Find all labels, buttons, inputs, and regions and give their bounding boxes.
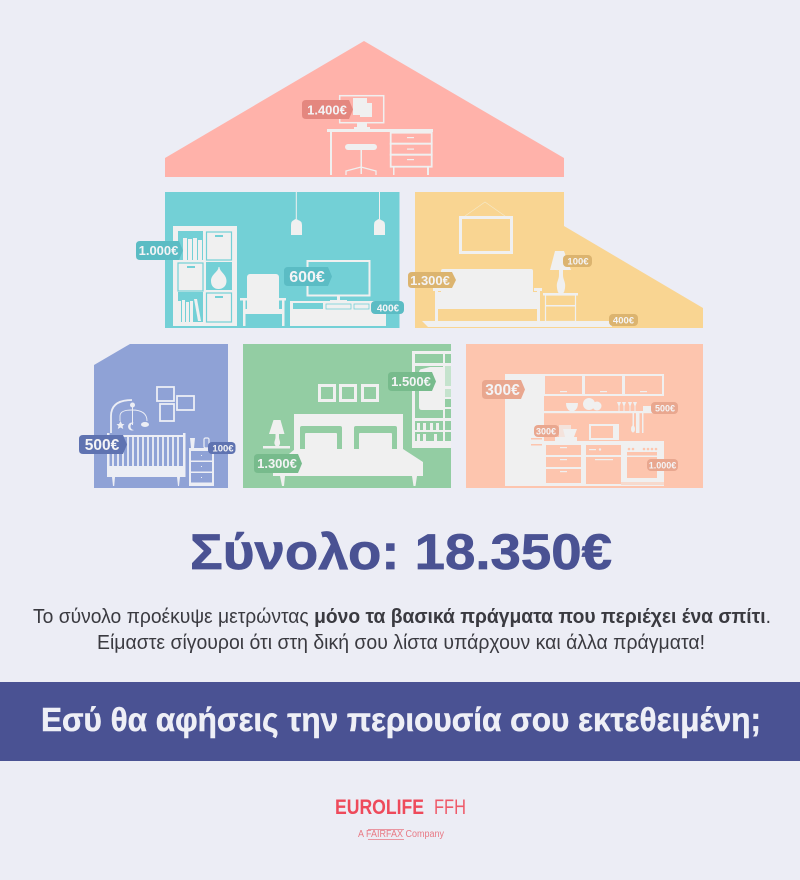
kitchen background xyxy=(466,344,703,488)
icon: armchair xyxy=(240,274,286,326)
price tag 500€ xyxy=(651,402,678,414)
icon: bedside lamp xyxy=(263,420,290,448)
price tag 100€ xyxy=(208,442,236,454)
banner question: Εσύ θα αφήσεις την περιουσία σου εκτεθειμένη; xyxy=(41,701,761,738)
lounge background xyxy=(415,192,703,328)
price tag 1.500€ xyxy=(388,372,436,391)
icon: crib with mobile xyxy=(107,400,186,486)
nursery background xyxy=(94,344,228,488)
price tag 100€ xyxy=(563,255,592,268)
icon: sofa and rug xyxy=(422,269,612,327)
price tag 1.300€: 1.300€ xyxy=(410,273,450,288)
price tag 400€: 400€ xyxy=(377,304,400,314)
logo wordmark: EUROLIFE xyxy=(335,796,424,819)
attic background xyxy=(165,41,564,177)
title: total: Σύνολο: 18.350€ xyxy=(190,524,612,580)
price tag 500€: 500€ xyxy=(85,437,120,454)
price tag 300€ small: 300€ xyxy=(536,426,556,436)
icon: bookcase xyxy=(173,226,237,326)
icon: nursery chest xyxy=(189,438,214,486)
panel: kitchen xyxy=(466,344,703,488)
price tag 1.400€: 1.400€ xyxy=(307,102,347,118)
panel: living room xyxy=(136,192,404,328)
icon: bed xyxy=(273,414,423,486)
logo FFH: FFH xyxy=(434,796,466,819)
price tag 1.000€: 1.000€ xyxy=(139,243,178,258)
price tag 1.400€ xyxy=(302,100,353,119)
price tag 100€: 100€ xyxy=(212,444,234,454)
price tag 1.300€: 1.300€ xyxy=(257,456,297,471)
price tag 600€: 600€ xyxy=(289,269,325,286)
panel: nursery xyxy=(79,344,236,488)
icon: microwave xyxy=(589,424,619,440)
panel: attic office xyxy=(165,41,564,177)
icon: wall frames xyxy=(157,387,194,421)
logo: Eurolife FFH xyxy=(335,796,466,840)
price tag 400€ xyxy=(609,314,638,326)
price tag 400€ xyxy=(371,301,404,314)
price tag 400€: 400€ xyxy=(613,316,635,326)
second line: Είμαστε σίγουροι ότι στη δική σου λίστα υπάρχουν και άλλα πράγματα! xyxy=(97,632,705,654)
icon: television and unit xyxy=(290,261,386,326)
living room background xyxy=(165,192,400,328)
logo tagline: A FAIRFAX Company xyxy=(358,829,444,840)
first line: Το σύνολο προέκυψε μετρώντας μόνο τα βασικά πράγματα που περιέχει ένα σπίτι. xyxy=(33,606,771,628)
price tag 1.500€: 1.500€ xyxy=(391,374,431,389)
icon: mixer xyxy=(555,425,577,441)
price tag 300€ small xyxy=(534,425,559,437)
icon: fridge xyxy=(505,374,544,486)
icon: pendant lamps xyxy=(291,192,385,235)
icon: desk with computer and stool xyxy=(327,96,433,175)
banner background xyxy=(0,682,800,761)
price tag 1.000€: 1.000€ xyxy=(649,460,676,470)
price tag 500€: 500€ xyxy=(655,404,675,414)
price tag 300€: 300€ xyxy=(485,382,520,399)
price tag 1.000€ xyxy=(136,241,183,260)
price tag 500€ xyxy=(79,435,127,454)
icon: shelf with dishes xyxy=(544,398,662,433)
price tag 1.300€ xyxy=(254,454,302,473)
icon: framed picture xyxy=(460,202,512,252)
icon: three frames xyxy=(320,386,378,400)
icon: side table and lamp xyxy=(543,251,578,322)
icon: upper cabinets xyxy=(544,374,664,396)
icon: wardrobe xyxy=(412,351,451,448)
text block: explanation xyxy=(33,606,771,654)
icon: lower cabinets and oven xyxy=(544,441,664,486)
banner xyxy=(0,682,800,761)
bedroom background xyxy=(243,344,451,488)
price tag 600€ xyxy=(284,267,332,286)
price tag 100€: 100€ xyxy=(567,256,589,268)
panel: lounge xyxy=(408,192,703,328)
panel: bedroom xyxy=(243,344,451,488)
